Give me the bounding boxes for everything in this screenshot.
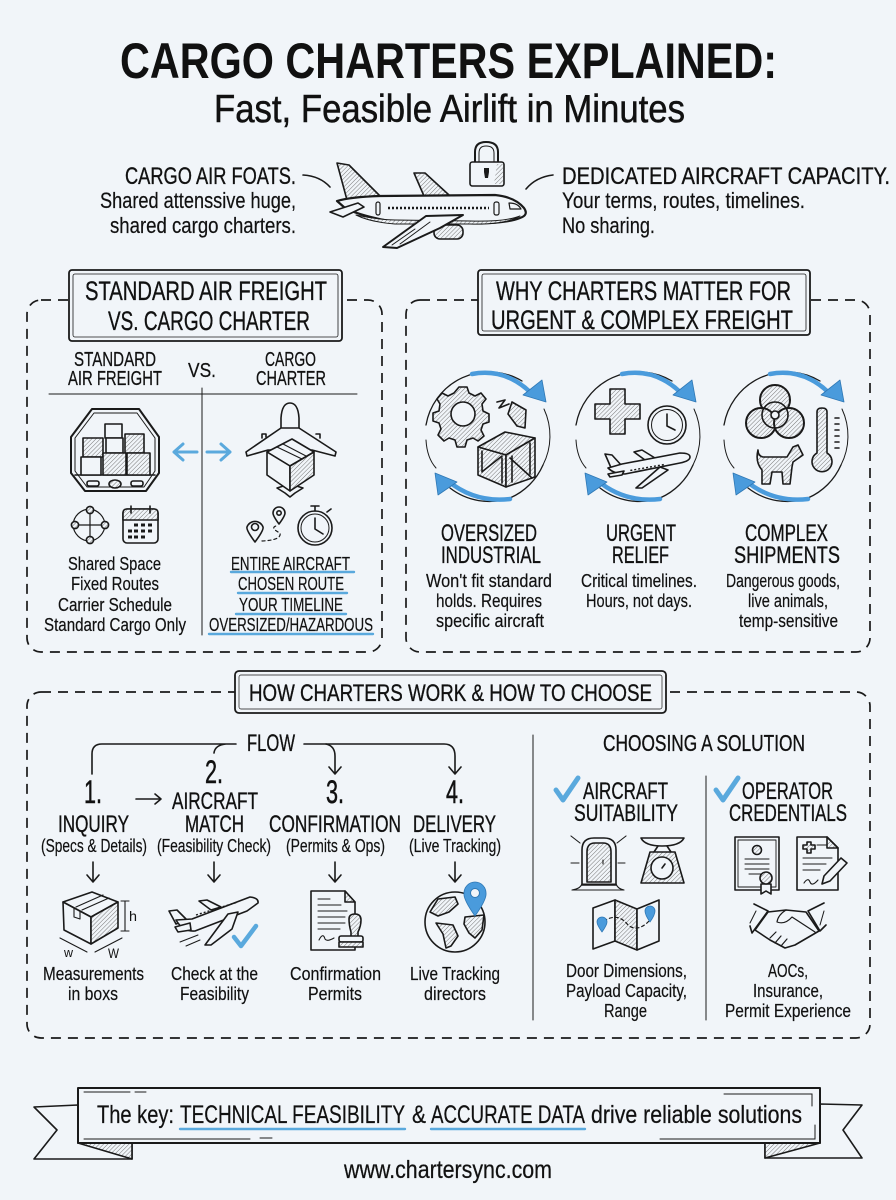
list: standard features: Carrier Schedule — [58, 595, 172, 615]
panel heading: why charters matter: WHY CHARTERS MATTER FOR — [496, 276, 791, 306]
text: complex shipments: COMPLEX — [745, 520, 828, 547]
title: CARGO CHARTERS EXPLAINED: — [120, 33, 777, 89]
step 1: inquiry: (Specs & Details) — [41, 836, 147, 856]
column: operator credentials: AOCs, — [768, 961, 808, 981]
icon: measured box — [60, 892, 137, 961]
step 3: confirmation: Permits — [308, 984, 362, 1004]
intro right text: No sharing. — [562, 213, 655, 238]
icon: handshake — [750, 903, 826, 948]
step 1: inquiry: Measurements — [43, 964, 144, 984]
icon: charter plane with box — [246, 403, 336, 497]
step 2: aircraft match: Check at the — [171, 964, 258, 984]
panel heading: standard vs charter: VS. CARGO CHARTER — [108, 306, 310, 336]
icon: hero airplane — [303, 163, 553, 248]
banner: key takeaway: drive reliable solutions — [591, 1101, 802, 1129]
column: aircraft suitability — [556, 778, 687, 1021]
column: operator credentials — [716, 778, 851, 1021]
icon: complex circle — [724, 372, 848, 501]
text: urgent relief: Hours, not days. — [586, 591, 692, 611]
icon: shared cargo hold — [71, 409, 159, 491]
icon: route map — [593, 900, 659, 950]
column: aircraft suitability: SUITABILITY — [574, 800, 678, 827]
icon: calendar — [123, 506, 158, 543]
column: operator credentials: Permit Experience — [725, 1001, 851, 1021]
list: standard features — [44, 554, 186, 635]
text: oversized industrial: INDUSTRIAL — [441, 542, 541, 569]
icon: urgent circle — [576, 372, 700, 501]
step 4: delivery: DELIVERY — [413, 811, 496, 838]
icon: oversized circle — [426, 372, 550, 501]
step 4: delivery — [409, 774, 501, 1004]
icon: measured box: w — [63, 945, 74, 960]
text: complex shipments: SHIPMENTS — [734, 542, 840, 569]
column header: cargo charter: CARGO — [265, 349, 316, 371]
icon: document with stamp — [311, 891, 363, 950]
step 1: inquiry: INQUIRY — [58, 811, 129, 838]
step 3: confirmation: Confirmation — [290, 964, 381, 984]
banner: key takeaway: The key: — [97, 1101, 174, 1129]
step 3: confirmation: CONFIRMATION — [269, 811, 401, 838]
intro left text: shared cargo charters. — [110, 213, 296, 238]
panel heading: standard vs charter: STANDARD AIR FREIGHT — [85, 276, 327, 306]
banner: key takeaway: TECHNICAL FEASIBILITY — [180, 1101, 405, 1129]
panel: standard vs charter — [27, 270, 382, 652]
text: complex shipments: temp-sensitive — [739, 611, 838, 631]
subtitle: Fast, Feasible Airlift in Minutes — [214, 88, 685, 131]
versus label: VS. — [188, 360, 216, 382]
column: aircraft suitability: Door Dimensions, — [566, 961, 687, 981]
intro left text — [100, 163, 296, 238]
panel heading: how charters work: HOW CHARTERS WORK & HOW TO CHOOSE — [249, 680, 652, 707]
step 2: aircraft match — [157, 754, 271, 1004]
list: charter features — [209, 554, 373, 635]
step 4: delivery: 4. — [446, 774, 464, 810]
column: operator credentials: CREDENTIALS — [729, 800, 847, 827]
column: operator credentials: Insurance, — [753, 981, 823, 1001]
text: complex shipments — [726, 520, 840, 631]
step 2: aircraft match: MATCH — [185, 811, 244, 838]
flow connectors — [92, 744, 461, 804]
step 4: delivery: (Live Tracking) — [409, 836, 501, 856]
flow label: FLOW — [247, 730, 295, 757]
text: complex shipments: live animals, — [748, 591, 828, 611]
panel: how charters work — [27, 671, 870, 1038]
heading: choosing a solution: CHOOSING A SOLUTION — [603, 730, 805, 756]
panel heading: how charters work — [235, 671, 666, 713]
intro right text — [562, 163, 890, 238]
step 2: aircraft match: (Feasibility Check) — [157, 836, 271, 856]
icon: globe with pin — [425, 882, 486, 952]
icon: padlock — [470, 142, 504, 186]
column: aircraft suitability: AIRCRAFT — [583, 778, 668, 805]
list: charter features: CHOSEN ROUTE — [238, 574, 344, 594]
text: oversized industrial: OVERSIZED — [441, 520, 537, 547]
step 4: delivery: directors — [424, 984, 486, 1004]
text: complex shipments: Dangerous goods, — [726, 571, 840, 591]
intro left text: CARGO AIR FOATS. — [125, 163, 296, 190]
step 2: aircraft match: AIRCRAFT — [172, 788, 258, 815]
icon: weighing scale — [641, 838, 684, 883]
list: standard features: Shared Space — [68, 554, 161, 574]
column header: standard air freight: AIR FREIGHT — [68, 368, 162, 390]
panel heading: why charters matter — [478, 270, 810, 335]
list: charter features: OVERSIZED/HAZARDOUS — [209, 615, 373, 635]
column: aircraft suitability: Payload Capacity, — [566, 981, 687, 1001]
list: standard features: Fixed Routes — [71, 574, 159, 594]
step 1: inquiry — [41, 774, 147, 1004]
banner: key takeaway — [34, 1088, 862, 1159]
step 4: delivery: Live Tracking — [410, 964, 500, 984]
list: charter features: ENTIRE AIRCRAFT — [231, 554, 350, 574]
icon: certificate — [735, 837, 779, 894]
step 3: confirmation — [269, 774, 401, 1004]
step 1: inquiry: 1. — [84, 774, 102, 810]
step 2: aircraft match: 2. — [205, 754, 223, 790]
icon: aircraft door — [571, 836, 626, 890]
banner: key takeaway: ACCURATE DATA — [431, 1101, 585, 1129]
step 3: confirmation: (Permits & Ops) — [286, 836, 385, 856]
panel heading: why charters matter: URGENT & COMPLEX FREIGHT — [491, 305, 793, 335]
text: oversized industrial: holds. Requires — [436, 591, 542, 611]
icon: measured box: h — [129, 908, 137, 924]
icon: measured box: W — [108, 945, 120, 961]
column: aircraft suitability: Range — [604, 1001, 647, 1021]
text: urgent relief: Critical timelines. — [581, 571, 697, 591]
icon: climbing plane with check — [169, 897, 258, 946]
text: oversized industrial: specific aircraft — [436, 611, 544, 631]
panel heading: standard vs charter — [69, 270, 342, 341]
column header: standard air freight: STANDARD — [74, 349, 156, 371]
step 1: inquiry: in boxs — [68, 984, 118, 1004]
column header: cargo charter — [256, 349, 326, 390]
intro right text: Your terms, routes, timelines. — [562, 188, 805, 213]
step 3: confirmation: 3. — [326, 774, 344, 810]
icon: stopwatch — [298, 506, 332, 545]
website url: www.chartersync.com — [343, 1156, 552, 1184]
icon: route network — [71, 506, 109, 544]
icon: route pins — [247, 507, 285, 542]
icon: comparison arrows — [174, 444, 230, 460]
text: oversized industrial — [426, 520, 552, 631]
panel: why charters matter — [406, 270, 870, 652]
title — [120, 33, 777, 131]
text: urgent relief: RELIEF — [612, 542, 669, 569]
text: oversized industrial: Won't fit standard — [426, 571, 552, 591]
column header: cargo charter: CHARTER — [256, 368, 326, 390]
list: standard features: Standard Cargo Only — [44, 615, 186, 635]
list: charter features: YOUR TIMELINE — [239, 595, 343, 615]
text: urgent relief — [581, 520, 697, 611]
intro left text: Shared attenssive huge, — [100, 188, 296, 213]
banner: key takeaway: & — [412, 1101, 426, 1129]
column header: standard air freight — [68, 349, 162, 390]
text: urgent relief: URGENT — [606, 520, 676, 547]
step 2: aircraft match: Feasibility — [180, 984, 249, 1004]
icon: signed document with pen — [797, 837, 847, 890]
column: operator credentials: OPERATOR — [742, 778, 833, 805]
